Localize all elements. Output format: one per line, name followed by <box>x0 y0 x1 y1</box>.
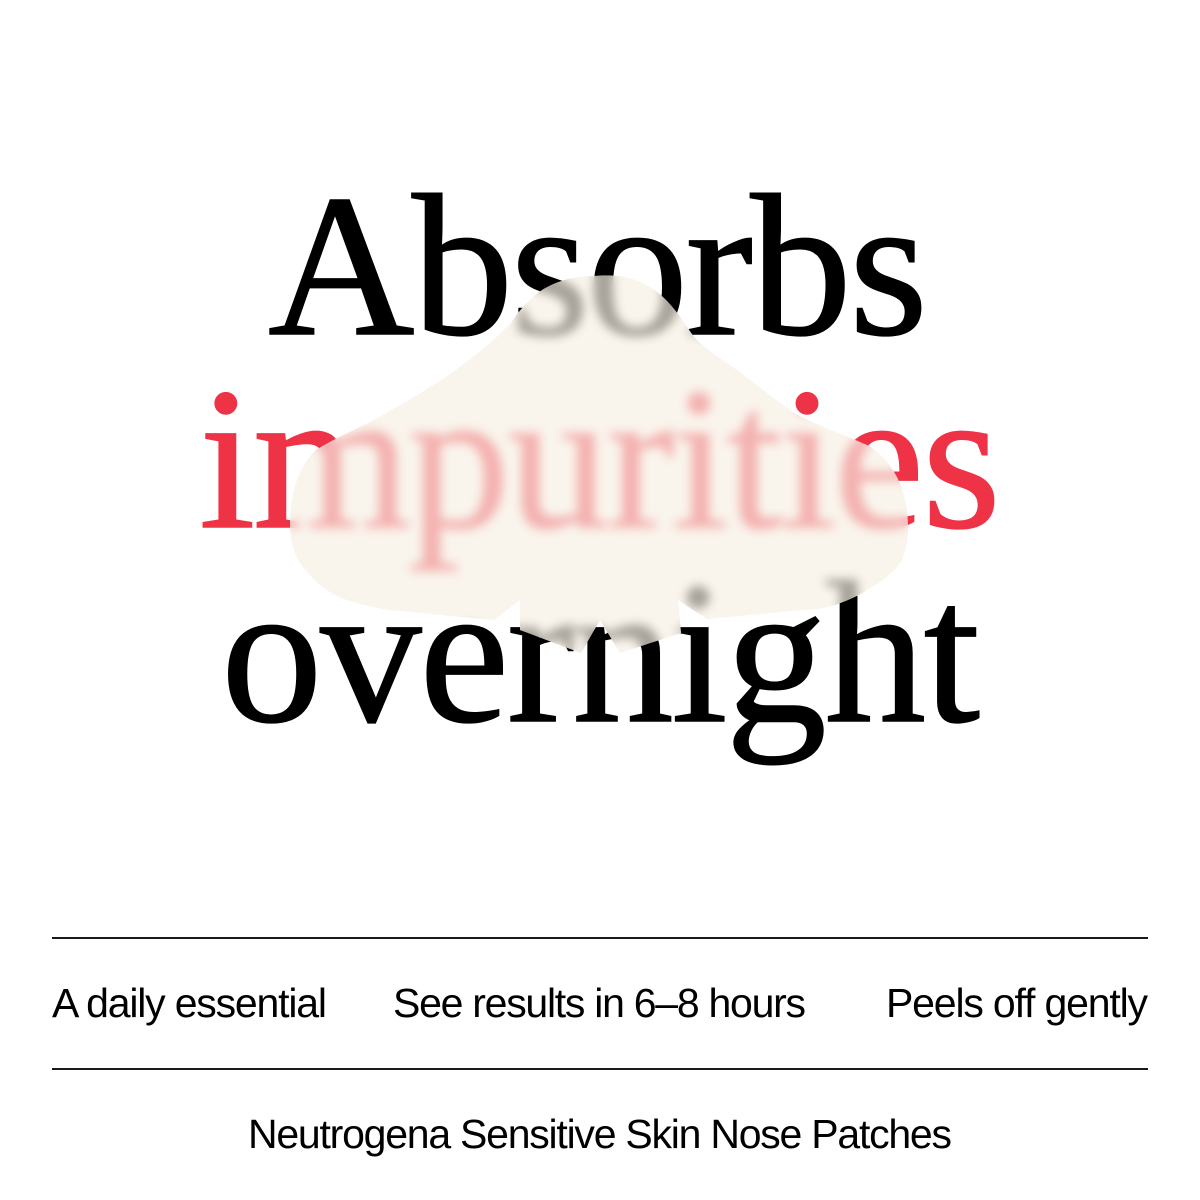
headline line: Absorbs: Absorbs <box>268 153 928 378</box>
benefit: A daily essential: A daily essential <box>52 980 327 1026</box>
headline line: impurities: impurities <box>199 346 1001 571</box>
benefit: Peels off gently: Peels off gently <box>886 980 1148 1026</box>
nose patch with blurred see-through text <box>290 275 908 653</box>
benefit: See results in 6–8 hours: See results in 6–8 hours <box>393 980 806 1026</box>
product name: Neutrogena Sensitive Skin Nose Patches <box>248 1111 952 1157</box>
headline line: overnight: overnight <box>221 540 980 765</box>
